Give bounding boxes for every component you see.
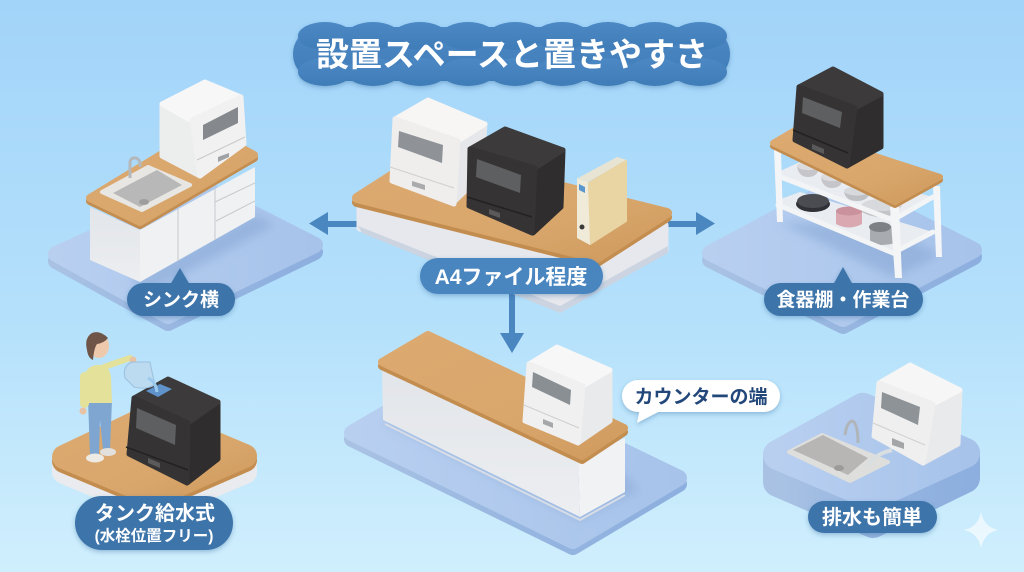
label: tank water supply: タンク給水式 [95,502,215,525]
soft shadow [778,222,940,278]
soft shadow [130,214,275,292]
label: cupboard and work table: 食器棚・作業台 [776,289,910,311]
white dishwasher [873,365,960,463]
wood base [64,416,245,499]
panel: easy drainage [778,365,965,533]
panel: cupboard and work table [710,69,974,326]
white dishwasher [390,100,485,204]
shelf front lips [778,176,933,253]
label: A4 size [420,258,603,294]
black dishwasher [793,69,881,166]
dishes [796,162,902,245]
platform [778,408,965,523]
table lower shelf [778,192,933,253]
white dishwasher [162,82,245,176]
label: next to sink: シンク横 [143,289,219,311]
label: tank water supply: (水栓位置フリー) [95,526,213,545]
panel: tank water supply [64,332,245,550]
label: A4 size: A4ファイル程度 [435,266,587,289]
platform [56,188,315,323]
platform [710,183,974,326]
cabinet [90,167,255,282]
label: tank water supply [75,496,233,550]
panel: center A4 footprint [357,100,668,313]
white base [64,424,245,510]
label: next to sink [127,268,235,316]
water jug [124,362,157,392]
black dishwasher [467,129,563,233]
label: cupboard and work table [764,267,923,316]
upper shelf [778,162,933,218]
arrow: right [664,212,715,235]
soft shadow [383,395,640,520]
sink [789,421,888,481]
A4 file binder [577,157,627,245]
wood countertop [90,128,254,225]
arrow: down [500,292,524,353]
sink [102,158,190,210]
callout: counter edge: カウンターの端 [634,386,768,408]
arrow: left [309,212,359,235]
table legs [774,150,942,278]
callout: counter edge [622,380,780,423]
panel: next to sink [56,82,315,323]
person pouring water [80,332,136,462]
label: easy drainage: 排水も簡単 [822,506,922,529]
drain hose [868,450,892,467]
scalloped banner shape [293,22,730,86]
white base [358,208,668,313]
label: easy drainage [808,501,937,533]
wood top [357,153,667,262]
counter body [382,368,625,520]
panel: counter edge [352,335,780,547]
title banner [293,22,730,86]
wood top [382,335,624,460]
white dishwasher [524,347,610,443]
black dishwasher [126,379,218,483]
table wood top [773,130,940,205]
title text: 設置スペースと置きやすさ [316,36,708,73]
icon: sparkle [964,512,998,548]
platform [352,371,679,547]
